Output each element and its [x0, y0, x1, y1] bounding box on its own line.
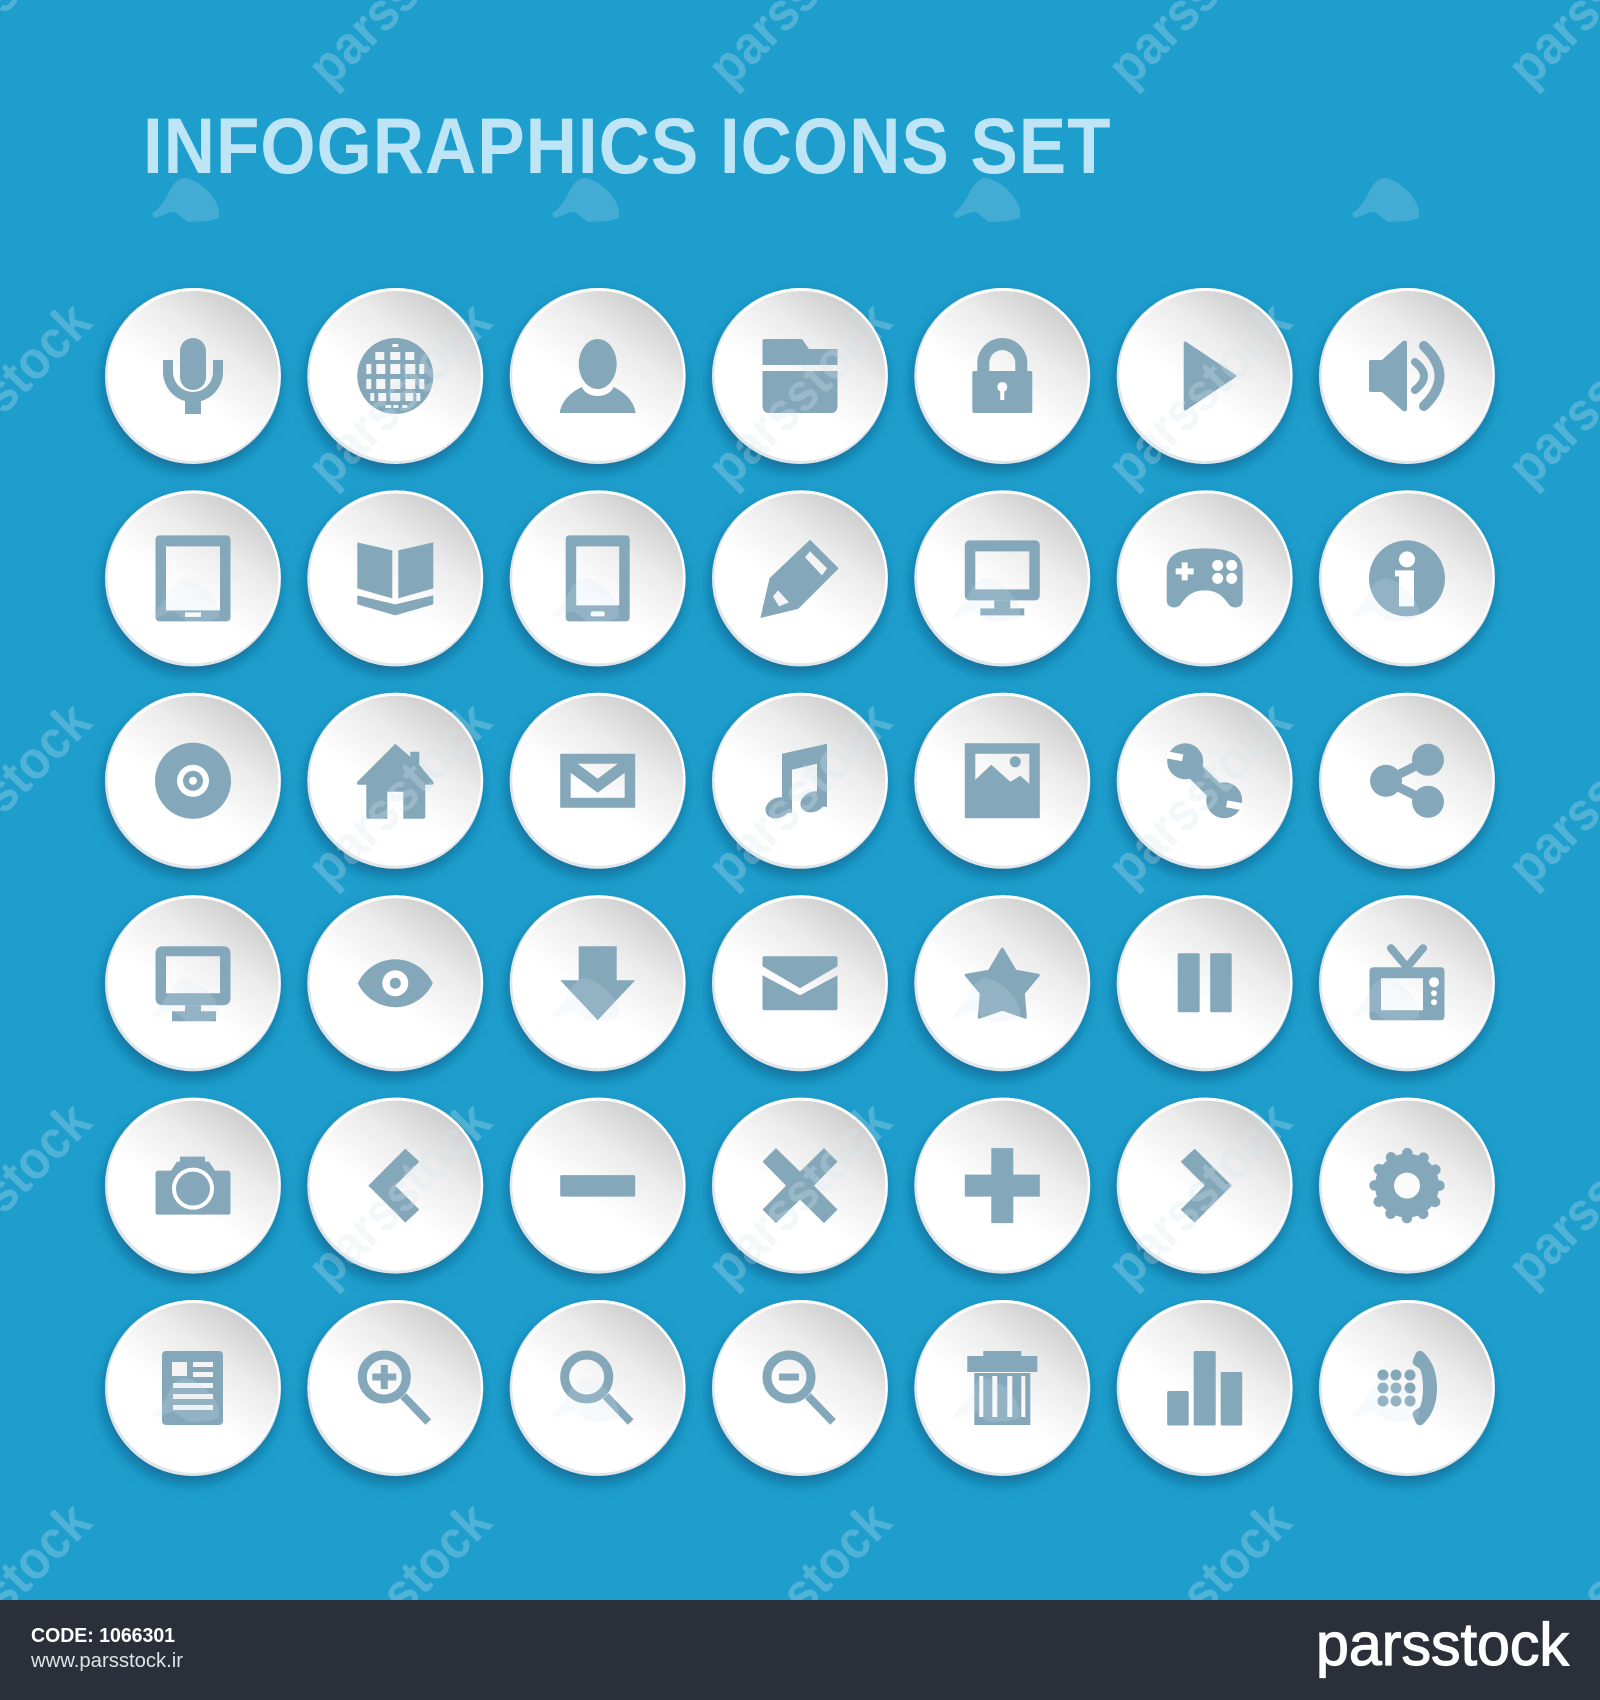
button: camera	[105, 1098, 281, 1274]
icon: play	[1185, 343, 1235, 409]
icon: pause	[1178, 953, 1232, 1012]
watermark: elephant marks	[152, 178, 1419, 1422]
icon: pencil	[761, 540, 838, 617]
button: telephone keypad	[1319, 1300, 1495, 1476]
watermark: parsstock text: parsstock	[296, 690, 503, 897]
button: gamepad	[1117, 490, 1293, 666]
icon: bar chart	[1167, 1351, 1242, 1426]
watermark: parsstock text: parsstock	[1096, 290, 1303, 497]
button: globe	[307, 288, 483, 464]
watermark: parsstock text: parsstock	[1096, 690, 1303, 897]
button: person	[510, 288, 686, 464]
button: folder	[712, 288, 888, 464]
watermark: parsstock text: parsstock	[1096, 1490, 1303, 1697]
watermark: parsstock text: parsstock	[696, 690, 903, 897]
button: picture	[914, 693, 1090, 869]
icon: speaker	[1369, 341, 1440, 411]
icon: globe	[357, 338, 433, 414]
watermark: parsstock text: parsstock	[696, 1090, 903, 1297]
button: info	[1319, 490, 1495, 666]
button: chevron right	[1117, 1098, 1293, 1274]
footer: website: www.parsstock.ir	[30, 1650, 183, 1672]
icon: camera	[156, 1157, 230, 1215]
watermark: parsstock text: parsstock	[296, 1090, 503, 1297]
icon: television	[1370, 948, 1444, 1020]
button: zoom out	[712, 1300, 888, 1476]
button: phone	[510, 490, 686, 666]
button: search	[510, 1300, 686, 1476]
button: speaker	[1319, 288, 1495, 464]
icon: info	[1369, 540, 1445, 616]
button: close	[712, 1098, 888, 1274]
button: plus	[914, 1098, 1090, 1274]
icon: picture	[965, 743, 1040, 818]
icon: tablet	[156, 535, 230, 621]
button: home	[307, 693, 483, 869]
icon: trash	[967, 1351, 1037, 1425]
icon: telephone keypad	[1378, 1351, 1437, 1425]
footer: image code: CODE: 1066301	[31, 1625, 175, 1647]
icon: music	[762, 744, 829, 822]
button: eye	[307, 895, 483, 1071]
button: bar chart	[1117, 1300, 1293, 1476]
button: music	[712, 693, 888, 869]
icon: home	[357, 744, 434, 819]
icon: wrench	[1167, 743, 1243, 818]
icon grid	[105, 288, 1495, 1476]
icon: close	[762, 1148, 838, 1223]
button: desktop monitor	[914, 490, 1090, 666]
button: chevron left	[307, 1098, 483, 1274]
icon: share	[1370, 744, 1444, 818]
icon: disc	[155, 743, 231, 819]
icon: desktop monitor	[965, 540, 1040, 615]
button: wrench	[1117, 693, 1293, 869]
button: download arrow	[510, 895, 686, 1071]
icon: chevron right	[1181, 1149, 1232, 1223]
icon: eye	[358, 959, 433, 1007]
icon: microphone	[163, 338, 223, 414]
icon: search	[565, 1355, 631, 1422]
button: minus	[510, 1098, 686, 1274]
button: microphone	[105, 288, 281, 464]
watermark: parsstock text: parsstock	[696, 1490, 903, 1697]
watermark: parsstock text: parsstock	[696, 290, 903, 497]
icon: star	[966, 949, 1038, 1017]
footer bar	[0, 1600, 1600, 1700]
button: envelope	[712, 895, 888, 1071]
button: zoom in	[307, 1300, 483, 1476]
icon: mail outline	[560, 754, 635, 808]
icon: minus	[560, 1175, 635, 1197]
icon: monitor	[156, 946, 230, 1021]
icon: zoom in	[362, 1355, 428, 1422]
button: pause	[1117, 895, 1293, 1071]
button: trash	[914, 1300, 1090, 1476]
button: play	[1117, 288, 1293, 464]
footer: logo: parsstock	[1316, 1611, 1570, 1678]
watermark: parsstock text: parsstock	[1096, 1090, 1303, 1297]
icon: news	[162, 1351, 223, 1425]
button: disc	[105, 693, 281, 869]
icon: zoom out	[767, 1355, 833, 1422]
button: tablet	[105, 490, 281, 666]
icon: person	[560, 339, 636, 413]
button: settings gear	[1319, 1098, 1495, 1274]
watermark: parsstock text: parsstock	[296, 1490, 503, 1697]
icon: chevron left	[368, 1149, 419, 1223]
button: lock	[914, 288, 1090, 464]
title: INFOGRAPHICS ICONS SET	[143, 102, 1111, 190]
icon: phone	[566, 535, 630, 621]
button: open book	[307, 490, 483, 666]
icon: download arrow	[560, 946, 635, 1020]
watermark: parsstock text: parsstock	[296, 290, 503, 497]
button: star	[914, 895, 1090, 1071]
button: monitor	[105, 895, 281, 1071]
button: television	[1319, 895, 1495, 1071]
icon: envelope	[762, 956, 838, 1010]
button: news	[105, 1300, 281, 1476]
button: mail outline	[510, 693, 686, 869]
icon: open book	[357, 542, 433, 615]
icon: folder	[762, 339, 838, 413]
button: pencil	[712, 490, 888, 666]
button: share	[1319, 693, 1495, 869]
icon: settings gear	[1374, 1153, 1440, 1218]
icon: gamepad	[1167, 548, 1243, 607]
icon: lock	[972, 338, 1032, 413]
icon: plus	[965, 1148, 1040, 1223]
